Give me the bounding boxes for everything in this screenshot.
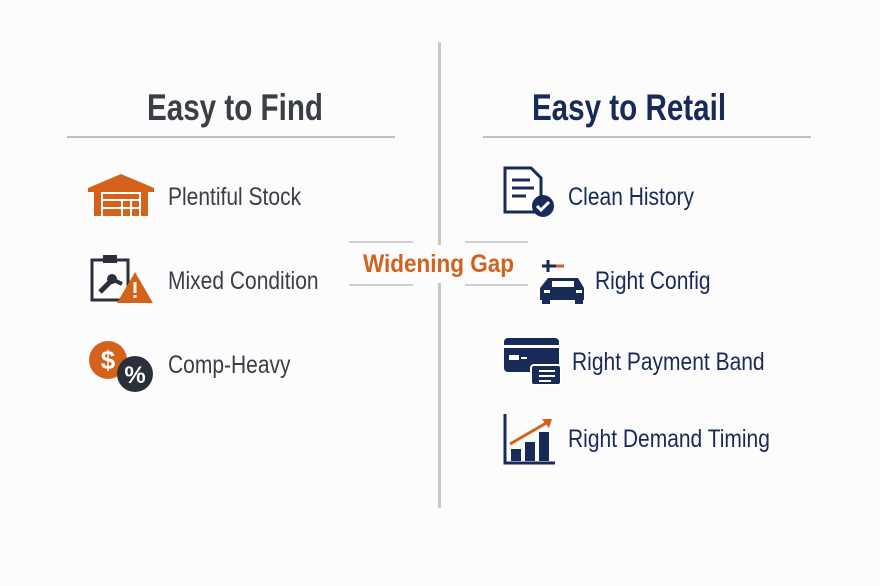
icon: car: [540, 260, 584, 304]
callout: Widening Gap: [349, 241, 528, 286]
icon: document check: [504, 166, 554, 217]
text: Plentiful Stock: Plentiful Stock: [168, 183, 301, 211]
icon: dollar percent: %: [124, 362, 146, 389]
icon: growth chart: [504, 414, 555, 464]
icon: clipboard warning: [90, 255, 153, 303]
title: Easy to Retail: Easy to Retail: [532, 87, 726, 128]
text: Right Config: Right Config: [595, 267, 711, 295]
text: Right Payment Band: Right Payment Band: [572, 348, 765, 376]
icon: garage: [88, 174, 154, 216]
text: Mixed Condition: Mixed Condition: [168, 267, 319, 295]
text: Comp-Heavy: Comp-Heavy: [168, 351, 291, 379]
text: Clean History: Clean History: [568, 183, 694, 211]
callout: Widening Gap: Widening Gap: [363, 250, 514, 278]
icon: credit card: [504, 338, 560, 384]
icon: dollar percent: [89, 341, 153, 392]
title: Easy to Find: Easy to Find: [147, 87, 323, 128]
text: Right Demand Timing: Right Demand Timing: [568, 425, 770, 453]
center divider: [438, 42, 441, 508]
icon: dollar percent: $: [101, 345, 116, 375]
